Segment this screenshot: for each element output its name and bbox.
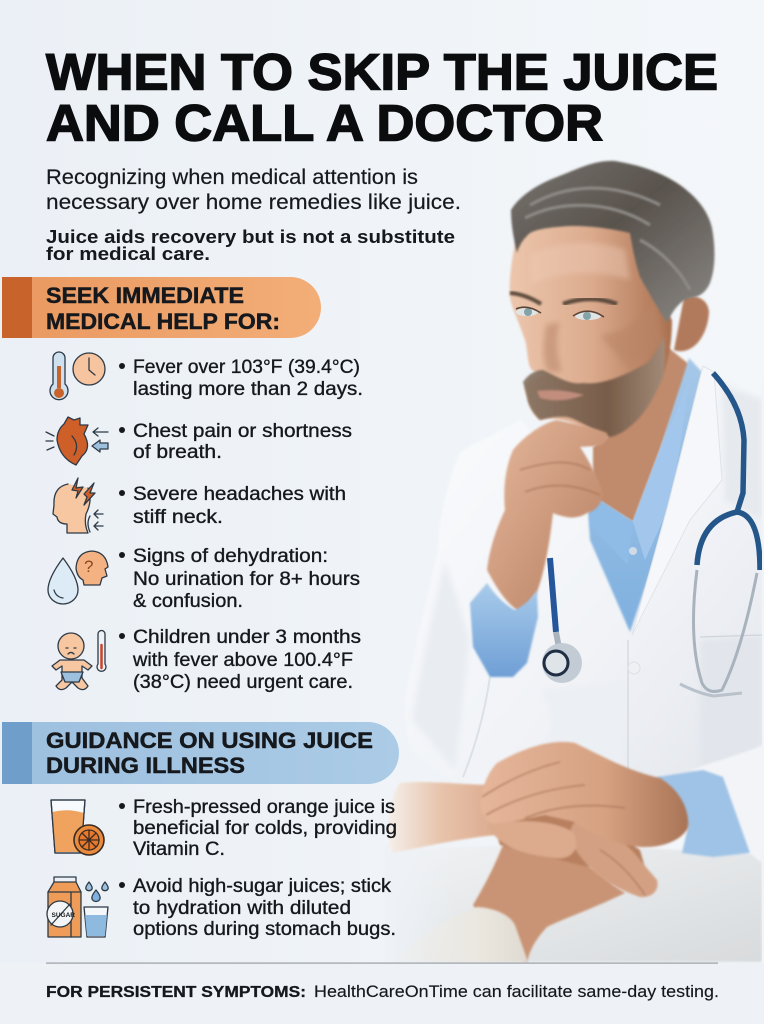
second hand fingers	[570, 820, 658, 897]
hair	[511, 161, 714, 323]
stethoscope	[542, 373, 760, 696]
banner: guidance on juice	[2, 722, 399, 784]
item: chest pain: of breath.	[133, 441, 222, 463]
item: orange juice: beneficial for colds, providing	[133, 817, 397, 839]
subtitle: necessary over home remedies like juice.	[46, 190, 461, 214]
item: dehydration	[119, 545, 360, 612]
note: Juice aids recovery but is not a substitute	[46, 226, 455, 247]
coat lapel	[632, 366, 722, 635]
icon: thermometer and clock	[50, 352, 105, 400]
chin hand and forearm	[487, 420, 607, 612]
face	[510, 213, 672, 437]
patient lower hand	[473, 844, 625, 962]
item: children: (38°C) need urgent care.	[133, 671, 353, 693]
blue shirt	[588, 358, 702, 632]
footer	[0, 962, 764, 1024]
item: avoid sugar: to hydration with diluted	[133, 897, 351, 919]
photo: doctor with clasped hands	[385, 161, 764, 963]
item: dehydration: Signs of dehydration:	[133, 545, 328, 567]
subtitle	[46, 165, 461, 214]
item: headache	[119, 483, 346, 528]
item: chest pain: Chest pain or shortness	[133, 420, 352, 442]
footer: HealthCareOnTime can facilitate same-day testing.	[314, 982, 719, 1001]
note	[46, 226, 455, 264]
title: WHEN TO SKIP THE JUICE	[46, 44, 718, 100]
item: chest pain	[119, 420, 352, 463]
item: dehydration: No urination for 8+ hours	[133, 568, 360, 590]
shadow between hands	[490, 810, 650, 885]
item: avoid sugar	[119, 875, 396, 940]
lips	[537, 390, 584, 400]
item: children: Children under 3 months	[133, 626, 361, 648]
banner: guidance on juice: DURING ILLNESS	[46, 753, 245, 778]
subtitle: Recognizing when medical attention is	[46, 165, 418, 189]
doctor sleeve	[690, 747, 762, 863]
item: avoid sugar: Avoid high-sugar juices; stick	[133, 875, 391, 897]
eyebrows and eyes	[510, 293, 617, 320]
icon: baby and thermometer	[52, 631, 106, 690]
item: fever: Fever over 103°F (39.4°C)	[133, 356, 360, 378]
banner: seek immediate help: MEDICAL HELP FOR:	[46, 309, 280, 334]
thumb	[487, 821, 576, 858]
icon: juice glass with orange slice	[51, 800, 104, 855]
icon: water drop and confused head	[48, 551, 108, 604]
ear	[674, 296, 709, 351]
footer: FOR PERSISTENT SYMPTOMS:	[46, 984, 306, 1001]
icon: water drop and confused head: ?	[84, 557, 93, 576]
item: fever	[119, 356, 363, 400]
upper hand back	[480, 742, 688, 847]
icon: heart with arrows	[46, 417, 108, 465]
banner: guidance on juice: GUIDANCE ON USING JUICE	[46, 728, 373, 753]
item: children: with fever above 100.4°F	[132, 649, 353, 671]
item: avoid sugar: options during stomach bugs.	[133, 918, 396, 940]
item: orange juice: Vitamin C.	[133, 838, 225, 860]
title: AND CALL A DOCTOR	[46, 94, 603, 152]
neck	[593, 345, 690, 522]
patient beige sleeve	[392, 907, 528, 962]
item: children	[119, 626, 361, 693]
doctor blue cuff	[657, 770, 750, 857]
title	[46, 44, 718, 152]
blue shirt cuff	[470, 583, 538, 677]
clasped hands	[480, 742, 688, 897]
item: orange juice: Fresh-pressed orange juice is	[133, 796, 395, 818]
item: dehydration: & confusion.	[133, 590, 243, 612]
item: fever: lasting more than 2 days.	[133, 378, 363, 400]
icon: sugar carton with water: SUGAR	[52, 912, 75, 919]
item: headache: Severe headaches with	[133, 483, 346, 505]
item: headache: stiff neck.	[133, 506, 223, 528]
icon: headache head	[53, 478, 103, 533]
lab coat	[405, 357, 762, 790]
patient forearm	[388, 782, 495, 853]
banner: seek immediate help: SEEK IMMEDIATE	[46, 283, 244, 308]
coat button	[628, 662, 640, 674]
banner: seek immediate help	[2, 277, 321, 338]
beard	[523, 337, 665, 437]
item: orange juice	[119, 796, 397, 860]
photo right margin	[762, 380, 764, 963]
table surface	[385, 845, 762, 963]
icon: sugar carton with water	[47, 877, 108, 937]
note: for medical care.	[46, 243, 210, 264]
